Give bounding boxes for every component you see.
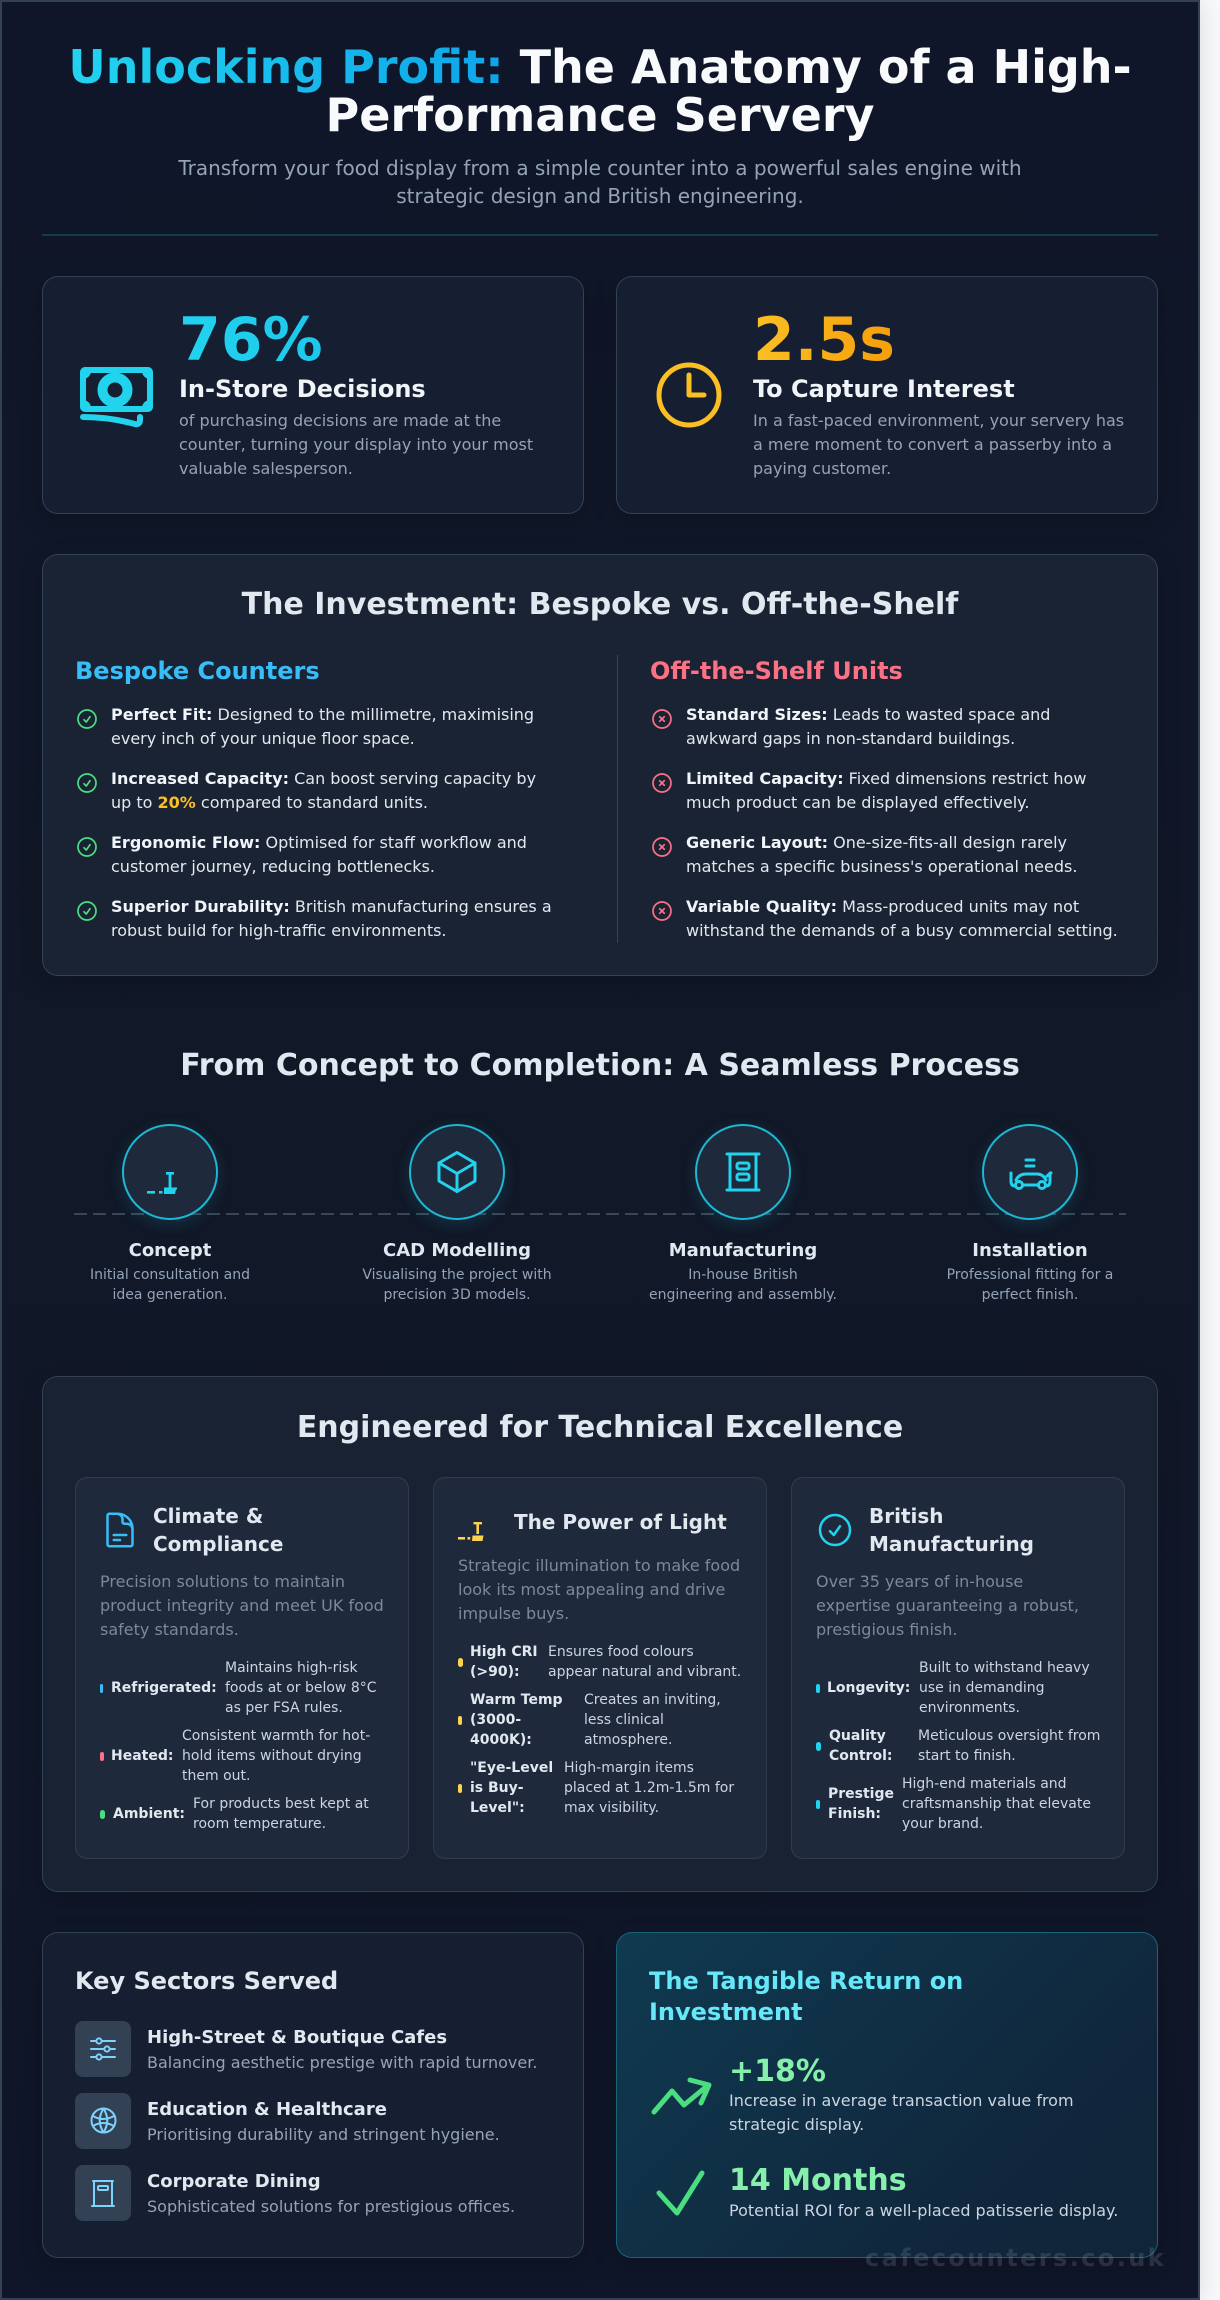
- sector: cafes: [75, 2021, 555, 2077]
- spec: longevity: use in demanding: [919, 1680, 1045, 1696]
- card heading: British: [869, 1504, 944, 1528]
- stat heading: To Capture Interest: [753, 375, 1015, 403]
- step description: precision 3D models.: [383, 1287, 531, 1303]
- spec: ambient: Ambient:: [113, 1806, 185, 1822]
- spec: longevity: Built to withstand heavy: [919, 1660, 1090, 1676]
- stat description: counter, turning your display into your most: [179, 435, 533, 454]
- stat description: [179, 411, 533, 478]
- stat heading: In-Store Decisions: [179, 375, 426, 403]
- spec: eye-level: [458, 1760, 734, 1816]
- card heading: Compliance: [153, 1532, 283, 1556]
- spec: ambient: room temperature.: [193, 1816, 326, 1832]
- process step: concept: [90, 1124, 250, 1303]
- heading: The Tangible Return on: [649, 1967, 963, 1995]
- card description: [816, 1572, 1079, 1639]
- icon: globe: [75, 2093, 131, 2149]
- stat description: a mere moment to convert a passerby into a: [753, 435, 1112, 454]
- stat number: 2.5s: [753, 305, 895, 375]
- icon: clock: [656, 362, 722, 428]
- spec: eye-level: max visibility.: [564, 1800, 659, 1816]
- spec: eye-level: High-margin items: [564, 1760, 694, 1776]
- spec: high CRI: High CRI: [470, 1644, 538, 1660]
- spec: warm temp: Warm Temp: [470, 1692, 563, 1708]
- icon: check badge: [818, 1514, 852, 1546]
- spec: heated: hold items without drying: [182, 1748, 362, 1764]
- process step: installation: [947, 1124, 1113, 1303]
- spec: longevity: Longevity:: [827, 1680, 910, 1696]
- spec: quality control: Quality: [829, 1728, 886, 1744]
- spec: warm temp: 4000K):: [470, 1732, 532, 1748]
- step title: Manufacturing: [669, 1240, 817, 1261]
- step description: Visualising the project with: [362, 1267, 552, 1283]
- stat description: [753, 411, 1124, 478]
- spec: heated: Heated:: [111, 1748, 173, 1764]
- off-the-shelf item 2: [652, 769, 1086, 812]
- off-the-shelf item 3: matches a specific business's operational needs.: [686, 857, 1077, 876]
- spec: prestige finish: [816, 1774, 1106, 1834]
- stat description: paying customer.: [753, 459, 891, 478]
- panel: return on investment: [616, 1932, 1158, 2258]
- bespoke item 3: [77, 833, 527, 876]
- card description: product integrity and meet UK food: [100, 1596, 384, 1615]
- spec: heated: Consistent warmth for hot-: [182, 1728, 370, 1744]
- panel: stat 76%: [42, 276, 584, 514]
- card description: Over 35 years of in-house: [816, 1572, 1023, 1591]
- off-the-shelf item 4: Variable Quality: Mass-produced units may not: [686, 897, 1079, 916]
- stat description: of purchasing decisions are made at the: [179, 411, 501, 430]
- spec: refrigerated: Maintains high-risk: [225, 1660, 358, 1676]
- bespoke item 2: [77, 769, 536, 812]
- spec: longevity: environments.: [919, 1700, 1020, 1716]
- spec: longevity: [816, 1660, 1090, 1716]
- metric: 14 months: [649, 2162, 1139, 2226]
- panel: stat 2.5s: [616, 276, 1158, 514]
- spec: prestige finish: your brand.: [902, 1816, 983, 1832]
- bespoke item 3: customer journey, reducing bottlenecks.: [111, 857, 435, 876]
- column heading: bespoke: Bespoke Counters: [75, 657, 320, 685]
- spec: quality control: [816, 1728, 1100, 1764]
- sector: education: Education & Healthcare: [147, 2099, 387, 2120]
- spec: high CRI: [458, 1644, 741, 1680]
- bespoke item 3: Ergonomic Flow: Optimised for staff workflow and: [111, 833, 527, 852]
- watermark: cafecounters.co.uk: [865, 2244, 1166, 2272]
- panel: comparison: [42, 554, 1158, 976]
- spec: warm temp: [458, 1692, 721, 1748]
- step description: perfect finish.: [982, 1287, 1078, 1303]
- title: Unlocking Profit: The Anatomy of a High-: [68, 40, 1132, 94]
- spec: quality control: Control:: [829, 1748, 892, 1764]
- heading: Engineered for Technical Excellence: [297, 1410, 903, 1445]
- icon: trending arrow: [649, 2053, 721, 2125]
- step description: Initial consultation and: [90, 1267, 250, 1283]
- bespoke item 1: Perfect Fit: Designed to the millimetre, maximising: [111, 705, 534, 724]
- process step: CAD modelling: [362, 1124, 552, 1303]
- off-the-shelf item 2: much product can be displayed effectively.: [686, 793, 1029, 812]
- step description: In-house British: [688, 1267, 798, 1283]
- spec: refrigerated: foods at or below 8°C: [225, 1680, 377, 1696]
- column heading: off-the-shelf: Off-the-Shelf Units: [650, 657, 903, 685]
- spec: high CRI: (>90):: [470, 1664, 520, 1680]
- card description: [458, 1556, 740, 1623]
- icon: door: [75, 2165, 131, 2221]
- step title: Concept: [129, 1240, 211, 1261]
- off-the-shelf item 4: [652, 897, 1118, 940]
- off-the-shelf item 4: withstand the demands of a busy commercial setting.: [686, 921, 1118, 940]
- sector: corporate: [75, 2165, 555, 2221]
- card heading: [869, 1504, 1034, 1556]
- stat description: valuable salesperson.: [179, 459, 353, 478]
- heading: [649, 1966, 963, 2028]
- spec: prestige finish: Prestige: [828, 1786, 894, 1802]
- bespoke item 4: robust build for high-traffic environments.: [111, 921, 447, 940]
- card description: Strategic illumination to make food: [458, 1556, 740, 1575]
- card heading: Climate &: [153, 1504, 263, 1528]
- spec: quality control: start to finish.: [918, 1748, 1016, 1764]
- spec: refrigerated: as per FSA rules.: [225, 1700, 343, 1716]
- card: british manufacturing: [791, 1477, 1125, 1859]
- spec: high CRI: Ensures food colours: [548, 1644, 694, 1660]
- icon: van: [982, 1124, 1078, 1220]
- card description: prestigious finish.: [816, 1620, 957, 1639]
- spec: eye-level: placed at 1.2m-1.5m for: [564, 1780, 734, 1796]
- step title: CAD Modelling: [383, 1240, 531, 1261]
- bespoke item 4: Superior Durability: British manufacturing ensures a: [111, 897, 552, 916]
- sector: corporate: Corporate Dining: [147, 2171, 321, 2192]
- card heading: Manufacturing: [869, 1532, 1034, 1556]
- card description: [100, 1572, 384, 1639]
- step title: Installation: [972, 1240, 1088, 1261]
- sector: corporate: Sophisticated solutions for prestigious offices.: [147, 2197, 515, 2216]
- step description: [90, 1267, 250, 1303]
- bespoke item 1: [77, 705, 534, 748]
- spec: high CRI: appear natural and vibrant.: [548, 1664, 741, 1680]
- icon: unit: [695, 1124, 791, 1220]
- spec: heated: them out.: [182, 1768, 250, 1784]
- off-the-shelf item 3: Generic Layout: One-size-fits-all design rarely: [686, 833, 1067, 852]
- step description: Professional fitting for a: [947, 1267, 1113, 1283]
- metric: 14 months: 14 Months: [729, 2163, 907, 2198]
- panel: technical excellence: [42, 1376, 1158, 1892]
- spec: refrigerated: Refrigerated:: [111, 1680, 217, 1696]
- spec: heated: [100, 1728, 370, 1784]
- card: power of light: [433, 1477, 767, 1859]
- sector: education: Prioritising durability and stringent hygiene.: [147, 2125, 500, 2144]
- spec: prestige finish: Finish:: [828, 1806, 881, 1822]
- title: Performance Servery: [326, 88, 874, 142]
- heading: Key Sectors Served: [75, 1967, 338, 1995]
- metric: +18%: strategic display.: [729, 2115, 864, 2134]
- bespoke item 1: every inch of your unique floor space.: [111, 729, 415, 748]
- spec: refrigerated: [100, 1660, 377, 1716]
- spec: eye-level: "Eye-Level: [470, 1760, 553, 1776]
- sector: cafes: Balancing aesthetic prestige with rapid turnover.: [147, 2053, 537, 2072]
- sector: education: [75, 2093, 555, 2149]
- card description: safety standards.: [100, 1620, 239, 1639]
- spec: quality control: Meticulous oversight from: [918, 1728, 1100, 1744]
- icon: cube: [409, 1124, 505, 1220]
- process timeline line: [74, 1213, 1126, 1215]
- process step: manufacturing: [649, 1124, 837, 1303]
- title: [68, 40, 1132, 142]
- heading: The Investment: Bespoke vs. Off-the-Shelf: [242, 587, 958, 622]
- card: climate and compliance: [75, 1477, 409, 1859]
- icon: check: [649, 2162, 721, 2222]
- bespoke item 4: [77, 897, 552, 940]
- spec: warm temp: less clinical: [584, 1712, 664, 1728]
- stat number: 76%: [179, 305, 323, 375]
- icon: light: [458, 1522, 484, 1541]
- subtitle: Transform your food display from a simple counter into a powerful sales engine with: [178, 156, 1022, 180]
- icon: sliders: [75, 2021, 131, 2077]
- icon: banknote: [80, 367, 153, 428]
- spec: ambient: [100, 1796, 369, 1832]
- card description: Precision solutions to maintain: [100, 1572, 345, 1591]
- subtitle: [178, 156, 1022, 208]
- panel: key sectors: [42, 1932, 584, 2258]
- heading: Investment: [649, 1998, 803, 2026]
- step description: engineering and assembly.: [649, 1287, 837, 1303]
- step description: [649, 1267, 837, 1303]
- spec: prestige finish: craftsmanship that elevate: [902, 1796, 1091, 1812]
- metric: +18%: [649, 2053, 1139, 2137]
- card description: impulse buys.: [458, 1604, 569, 1623]
- card description: expertise guaranteeing a robust,: [816, 1596, 1079, 1615]
- card heading: The Power of Light: [514, 1510, 727, 1534]
- card heading: [153, 1504, 283, 1556]
- off-the-shelf item 1: Standard Sizes: Leads to wasted space and: [686, 705, 1050, 724]
- spec: prestige finish: High-end materials and: [902, 1776, 1067, 1792]
- off-the-shelf item 3: [652, 833, 1077, 876]
- off-the-shelf item 1: [652, 705, 1050, 748]
- spec: warm temp: Creates an inviting,: [584, 1692, 721, 1708]
- card description: look its most appealing and drive: [458, 1580, 725, 1599]
- bespoke item 2: Increased Capacity: Can boost serving capacity by: [111, 769, 536, 788]
- sector: cafes: High-Street & Boutique Cafes: [147, 2027, 447, 2048]
- spec: eye-level: is Buy-: [470, 1780, 524, 1796]
- bespoke item 2: up to 20% compared to standard units.: [111, 793, 428, 812]
- stat description: In a fast-paced environment, your servery has: [753, 411, 1124, 430]
- spec: warm temp: atmosphere.: [584, 1732, 672, 1748]
- step description: idea generation.: [112, 1287, 228, 1303]
- off-the-shelf item 1: awkward gaps in non-standard buildings.: [686, 729, 1015, 748]
- metric: 14 months: Potential ROI for a well-placed patisserie display.: [729, 2201, 1118, 2220]
- icon: document: [106, 1512, 134, 1548]
- step description: [947, 1267, 1113, 1303]
- spec: ambient: For products best kept at: [193, 1796, 369, 1812]
- spec: warm temp: (3000-: [470, 1712, 521, 1728]
- step description: [362, 1267, 552, 1303]
- header: [42, 40, 1158, 236]
- spec: eye-level: Level":: [470, 1800, 525, 1816]
- subtitle: strategic design and British engineering.: [396, 184, 804, 208]
- icon: concept: [122, 1124, 218, 1220]
- metric: +18%: +18%: [729, 2054, 826, 2089]
- metric: +18%: Increase in average transaction value from: [729, 2091, 1074, 2110]
- heading: process: From Concept to Completion: A Seamless Process: [180, 1048, 1020, 1083]
- off-the-shelf item 2: Limited Capacity: Fixed dimensions restrict how: [686, 769, 1086, 788]
